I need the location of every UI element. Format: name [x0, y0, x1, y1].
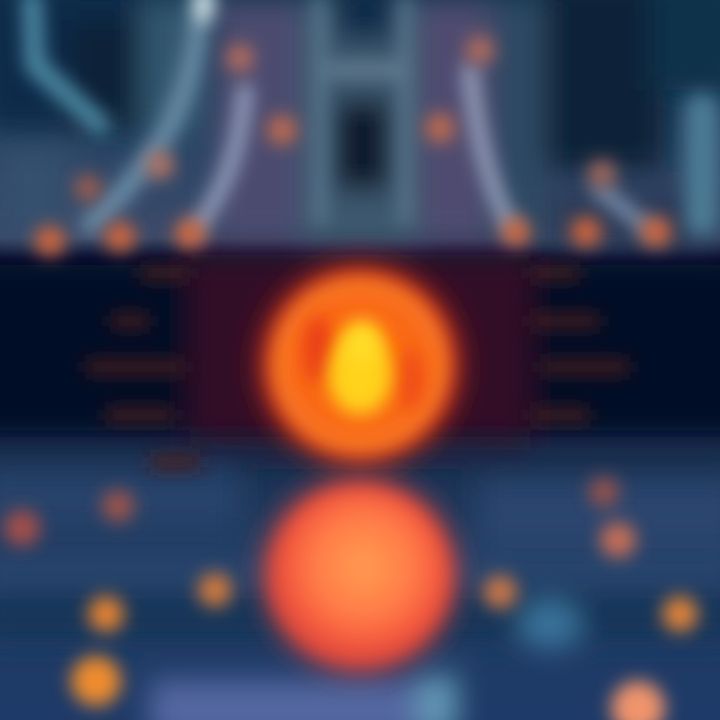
panel: upper pillars and pipes	[0, 0, 720, 250]
panel: dark middle band	[0, 255, 720, 450]
icon: circle reflection	[264, 479, 456, 671]
panel: lower reflective floor	[0, 445, 720, 720]
icon: glowing orange circle	[260, 265, 460, 465]
icon: faint orange marks in dark band	[85, 266, 630, 469]
icon: orange nodes, lower area	[4, 477, 698, 720]
icon: orange nodes, upper area	[35, 36, 671, 256]
